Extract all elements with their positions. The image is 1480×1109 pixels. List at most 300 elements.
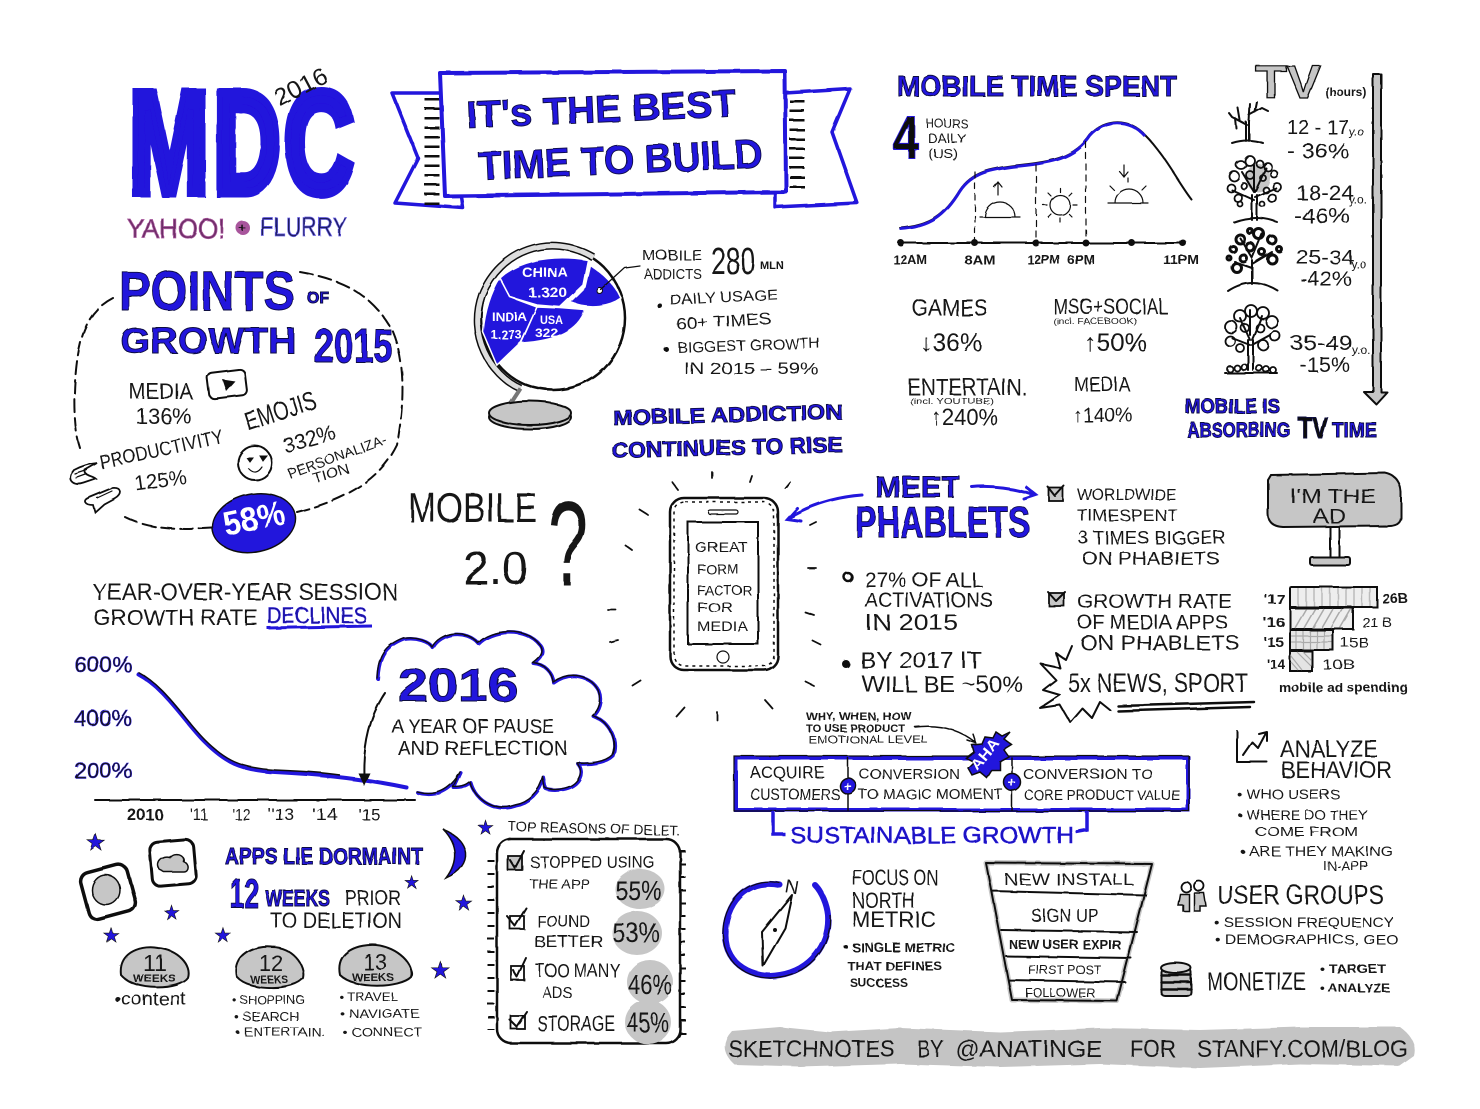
productivity stat: 125% [133,466,188,496]
process box: ACQUIRE [750,763,825,782]
media stat: MEDIA [129,379,193,404]
usage line chart: 6PM [1067,252,1095,267]
check: worldwide timespent: ON PHABIETS [1082,549,1220,569]
stats list [658,286,820,378]
heading: mobile 2.0: MOBILE [408,484,537,531]
check: growth rate: OF MEDIA APPS [1077,612,1228,634]
bubble: 11 weeks: 11 [143,950,167,976]
stars: ★ [430,957,451,983]
arrow to facts [972,486,1036,499]
bar chart: '16 [1263,614,1285,630]
panel: analyze behavior [1237,731,1393,873]
icon: play [207,369,247,399]
bar chart [1263,587,1408,672]
four hours daily: HOURS [926,116,968,131]
age: 12-17: y.o [1349,125,1364,139]
list: 11 weeks: •content [114,989,186,1009]
bullets [1320,962,1390,995]
bullets: COME FROM [1255,824,1358,839]
bullets: • WHO USERS [1237,786,1340,802]
plus connectors: + [844,778,852,794]
panel: 2016 cloud [358,632,615,808]
reason: stopped using: THE APP [530,876,590,892]
panel: funnel [986,863,1152,1001]
check: growth rate [1048,591,1240,655]
billboard: AD [1313,506,1346,528]
panel: monetize [1161,962,1390,996]
reason: stopped using [508,851,665,909]
bubble: 13 weeks: 13 [363,949,387,975]
stars: ★ [103,926,120,947]
activation facts: BY 2017 IT [860,647,982,673]
logo wordmark: D [213,61,281,224]
activation facts [842,569,1023,697]
downward arrow [1364,74,1387,404]
cloud ink line [377,632,614,807]
metric text: METRIC [852,907,936,932]
funnel labels: SIGN UP [1031,906,1099,926]
tree: 25-34 [1227,228,1282,291]
x-axis: '15 [358,805,380,824]
x-axis: '14 [312,805,338,824]
list: 12 weeks [232,993,325,1039]
bullets: • TARGET [1320,962,1387,976]
stats list: BIGGEST GROWTH [678,335,820,357]
heading: POINTS [119,259,295,322]
media stat: 136% [136,404,192,429]
mobile addicts: 280 [711,241,755,283]
icon: weather app [149,839,197,887]
bullets: IN-APP [1323,858,1368,873]
stars: ★ [163,903,180,924]
globe: USA [540,313,563,327]
heading: BEHAVIOR [1281,757,1392,784]
aha burst: AHA [967,735,1003,774]
metric text: NORTH [852,888,915,913]
icon: coin stack [1161,963,1191,996]
reason: too many ads: 46% [628,969,672,1000]
explanatory note: WHY, WHEN, HOW [806,711,913,723]
stat: entertainment: (incl. YOUTUBE) [910,397,994,406]
tree: 18-24 [1227,156,1281,222]
bullets [1214,914,1398,947]
reason: stopped using: 55% [615,875,662,906]
reason: storage: 45% [627,1007,669,1038]
process box: CORE PRODUCT VALUE [1024,787,1180,804]
heading: MOBILE TIME SPENT [897,71,1177,103]
process box [734,756,1189,811]
bar chart: '17 [1264,591,1285,607]
metric text: FOCUS ON [852,865,938,890]
stars: ★ [455,893,473,915]
reason: found better: 53% [612,917,660,948]
panel: title banner [392,71,857,208]
bullets: • DEMOGRAPHICS, GEO [1215,931,1398,947]
year: 2016 [270,62,332,112]
phone drawing [670,498,778,670]
banner heading: IT's THE BEST [466,83,737,137]
tree: 35-49 [1225,305,1280,373]
list: 12 weeks: • SEARCH [234,1009,299,1024]
process box: CONVERSION [859,766,960,783]
process box: CUSTOMERS [750,785,840,804]
mobile addicts: ADDICTS [644,266,702,283]
emojis stat: PERSONALIZA- [286,431,389,482]
emojis stat: TION [311,461,351,486]
panel: ad spending [1263,473,1408,695]
panel: reasons for deletion [491,818,682,1044]
activation facts: WILL BE ~50% [862,671,1023,697]
activation facts: ACTIVATIONS [865,589,993,612]
age: 18-24 [1294,182,1367,228]
age: 12-17 [1287,117,1364,163]
x-axis [95,800,415,824]
chart heading: DECLINES [267,603,367,628]
heading: SUSTAINABLE GROWTH [790,822,1074,848]
heading: USER GROUPS [1217,880,1384,910]
caption [392,716,568,760]
panel: north metric [723,865,956,990]
left ribbon [392,93,463,208]
billboard: I'M THE [1290,486,1376,508]
four hours daily: DAILY [928,131,966,146]
funnel labels: NEW USER EXPIR [1009,937,1122,952]
bullets: • ARE THEY MAKING [1240,843,1393,859]
bar chart: 26B [1382,590,1408,606]
x-axis: 2010 [127,805,163,824]
caption: A YEAR OF PAUSE [392,716,554,738]
emojis stat [241,385,389,486]
addiction heading: MOBILE ADDICTION [613,401,843,430]
age: 18-24: y.o. [1349,193,1367,207]
bubble: 13 weeks: WEEKS [352,972,394,984]
bubble: 11 weeks: WEEKS [133,973,176,985]
y-axis labels: 400% [74,706,132,731]
mobile addicts: MOBILE [642,247,702,264]
funnel shadow [986,863,1152,1001]
caption [1185,396,1377,445]
heading: mobile 2.0 [408,477,588,611]
globe meridian ring [478,246,593,388]
arrowhead [358,773,370,786]
age: 35-49 [1290,332,1370,377]
heading: OF [307,290,329,307]
bullets [1237,786,1393,873]
age: 25-34: -42% [1300,268,1352,291]
age: 18-24: -46% [1294,205,1350,228]
footer credit: SKETCHNOTES [728,1036,895,1063]
compass: N [783,876,800,899]
year: 2016 [398,659,518,711]
reason: too many ads: ADS [542,983,572,1002]
footer credit: FOR [1130,1036,1176,1063]
stats list: 60+ TIMES [675,311,772,333]
panel: TV hours [1185,56,1387,445]
bubble: 12 weeks [236,947,303,988]
four hours daily [893,104,968,171]
list: 13 weeks: • TRAVEL [339,990,398,1004]
footer credit: BY [917,1036,944,1063]
stars: ★ [86,830,106,855]
explanatory note: EMOTIONAL LEVEL [808,734,928,746]
usage line chart: 12AM [893,252,927,267]
footer credit: STANFY.COM/BLOG [1197,1036,1408,1063]
globe: CHINA [522,264,568,280]
icon: chat app [79,863,137,921]
moon [443,829,466,878]
stat: entertainment: ENTERTAIN. [907,374,1027,401]
mobile addicts: MLN [760,260,784,272]
process box: TO MAGIC MOMENT [858,786,1003,803]
plus connectors: + [1008,774,1016,790]
logo wordmark: M [129,61,209,224]
age: 25-34: y.o [1351,257,1366,271]
logo wordmark [129,61,354,224]
stars: ★ [404,873,419,892]
twelve weeks: 12 [230,870,259,917]
stats list: IN 2015 – 59% [684,359,818,378]
aha burst [966,732,1012,778]
panel: mobile time spent [893,71,1199,430]
icon: smiley [238,446,272,480]
age: 18-24: 18-24 [1296,182,1354,205]
globe stand [489,388,571,429]
heading: PHABLETS [855,498,1030,547]
chart heading [92,579,398,630]
burst: 5x news and sport [1040,646,1254,722]
stat: media: MEDIA [1074,374,1131,396]
stars: ★ [214,925,232,947]
heading: 2015 [314,319,393,372]
compass [723,876,830,978]
usage line chart: 8AM [964,252,995,267]
panel: session growth chart [74,579,415,824]
caption: TV [1298,412,1328,445]
stat: games: ↓36% [920,329,982,357]
footer credit: @ANATINGE [955,1036,1102,1063]
bar chart: 21 B [1362,614,1392,630]
side ticks [491,850,682,1035]
twelve weeks: TO DELETION [270,908,402,933]
funnel labels: FIRST POST [1028,962,1101,977]
caption: MOBILE IS [1185,396,1280,418]
banner card [440,71,786,196]
panel: sustainable growth [734,711,1189,848]
stat: media: ↑140% [1073,405,1133,427]
stat: entertainment [907,374,1027,430]
y-axis labels [74,652,132,783]
age: 35-49: -15% [1300,354,1350,377]
globe [478,246,640,390]
footer credit [725,1027,1415,1068]
phone drawing: FACTOR [697,582,752,598]
age: 25-34 [1296,247,1366,291]
four hours daily: 4 [893,104,919,171]
mobile addicts [642,241,784,283]
stat: messaging and social [1053,294,1168,357]
chart caption: mobile ad spending [1279,680,1408,695]
heading: mobile 2.0: 2.0 [463,542,528,594]
phone drawing: FORM [697,561,739,577]
bubble: 12 weeks: 12 [259,950,283,976]
explanatory note: TO USE PRODUCT [806,723,905,735]
process box: CONVERSION TO [1023,766,1153,783]
usage line chart: 11PM [1163,252,1199,267]
caption: TIME [1332,419,1377,442]
icon: people [1178,881,1206,911]
banner heading [466,83,763,189]
y-axis labels: 600% [74,652,132,677]
box [497,839,680,1043]
emojis stat: 332% [280,420,338,458]
sponsors: YAHOO! [127,213,225,244]
sponsors [127,212,347,244]
sponsors: + [238,220,246,235]
TV heading: (hours) [1325,85,1366,99]
age: 35-49: y.o. [1352,343,1370,357]
age: 25-34: 25-34 [1296,247,1354,269]
stat: messaging and social: (incl. FACEBOOK) [1053,317,1137,326]
stat: games [912,295,988,357]
plus connectors [840,774,1020,794]
productivity stat: PRODUCTIVITY [97,426,225,474]
twelve weeks: WEEKS [265,885,330,911]
check: worldwide timespent: WORLDWIDE [1077,485,1176,504]
heading [855,471,1030,547]
arrow [364,693,385,775]
bullets: • ANALYZE [1320,981,1390,995]
list: 12 weeks: • SHOPPING [232,993,305,1007]
globe: INDIA [492,310,527,324]
twelve weeks: PRIOR [345,887,401,910]
phone glow rays [608,472,820,720]
age: 35-49: 35-49 [1290,332,1352,355]
banner heading: TIME TO BUILD [477,132,763,189]
stat: media [1073,374,1133,427]
media stat [129,379,193,429]
stat: entertainment: ↑240% [931,404,998,430]
heading: MEET [875,471,960,504]
heading: mobile 2.0: ? [548,477,588,611]
logo wordmark: C [284,61,354,224]
panel: points of growth [70,259,402,560]
chart heading: GROWTH RATE [93,605,258,630]
metric text: THAT DEFINES [847,959,942,973]
tree: 12-17 [1229,102,1268,143]
heading: ANALYZE [1280,736,1378,763]
check: worldwide timespent: TIMESPENT [1077,506,1178,525]
stat: messaging and social: ↑50% [1084,329,1147,357]
globe: 322 [535,326,558,340]
arrow to phone [787,495,862,521]
metric text [844,865,956,990]
list: 13 weeks: • NAVIGATE [340,1007,420,1021]
ribbon hatching [432,98,797,205]
bar chart: '14 [1267,656,1285,672]
icon: rising chart [1237,731,1267,762]
reason: too many ads: TOO MANY [535,961,620,982]
list: 13 weeks: • CONNECT [342,1025,423,1039]
list: 13 weeks [339,990,423,1039]
phone drawing: FOR [697,599,733,615]
usage line chart: 12PM [1027,252,1060,267]
bar chart: 10B [1322,656,1355,672]
emojis stat: EMOJIS [241,385,320,437]
reason: stopped using: STOPPED USING [530,853,655,872]
four hours daily: (US) [928,146,958,161]
burst: 5x news and sport: 5x NEWS, SPORT [1068,668,1248,698]
caption: ABSORBING [1187,419,1290,442]
heading [1280,736,1392,784]
bubble: 11 weeks [121,947,189,987]
panel: apps lie dormant [79,818,494,1039]
addiction heading: CONTINUES TO RISE [611,432,843,463]
globe: 1.273 [491,328,522,342]
funnel labels: FOLLOWER [1025,985,1095,1000]
caption: AND REFLECTION [398,738,568,760]
reason: too many ads [511,958,673,1004]
bullets: • WHERE DO THEY [1238,807,1369,823]
usage line chart [893,122,1199,267]
check: worldwide timespent: 3 TIMES BIGGER [1078,528,1226,548]
stars: ★ [477,818,494,839]
check: growth rate: GROWTH RATE [1077,591,1232,613]
activation facts: IN 2015 [865,610,958,635]
funnel labels: NEW INSTALL [1004,870,1134,889]
reason: found better: BETTER [534,932,603,951]
heading: GROWTH [120,320,296,361]
heading: TOP REASONS OF DELET. [508,818,680,839]
reason: storage [510,1000,671,1044]
check: growth rate: ON PHABLETS [1080,632,1240,655]
panel: globe and addiction [478,241,843,463]
globe: 1.320 [528,284,567,300]
funnel labels [1004,870,1134,1000]
activation facts: 27% OF ALL [865,569,983,592]
funnel shape [986,863,1152,1001]
decline curve [138,672,407,788]
phone drawing: MEDIA [697,618,749,634]
heading: APPS LIE DORMAINT [225,843,423,869]
heading [119,259,393,372]
bracket [773,811,1087,834]
badge: 58 percent [207,486,301,560]
heading: MONETIZE [1207,968,1306,996]
list: 12 weeks: • ENTERTAIN. [235,1025,325,1039]
age: 12-17: - 36% [1287,140,1349,163]
TV heading: TV [1255,56,1321,108]
stars [86,818,494,983]
phone drawing: GREAT [695,539,748,555]
age: 12-17: 12 - 17 [1287,117,1349,139]
bubble: 13 weeks [339,945,412,986]
bar chart: '15 [1264,634,1284,650]
reason: found better [507,908,662,955]
billboard [1268,473,1401,565]
explanatory note [806,711,976,746]
check: worldwide timespent [1048,485,1226,569]
TV heading [1255,56,1366,108]
reason: found better: FOUND [537,912,590,931]
reason: storage: STORAGE [537,1011,615,1036]
cloud outline [378,632,615,808]
stat: games: GAMES [912,295,988,322]
twelve weeks [230,870,402,933]
bubble: 12 weeks: WEEKS [250,974,288,986]
sponsors: FLURRY [260,212,347,242]
stat: messaging and social: MSG+SOCIAL [1053,294,1168,319]
dashed outline [74,272,402,529]
